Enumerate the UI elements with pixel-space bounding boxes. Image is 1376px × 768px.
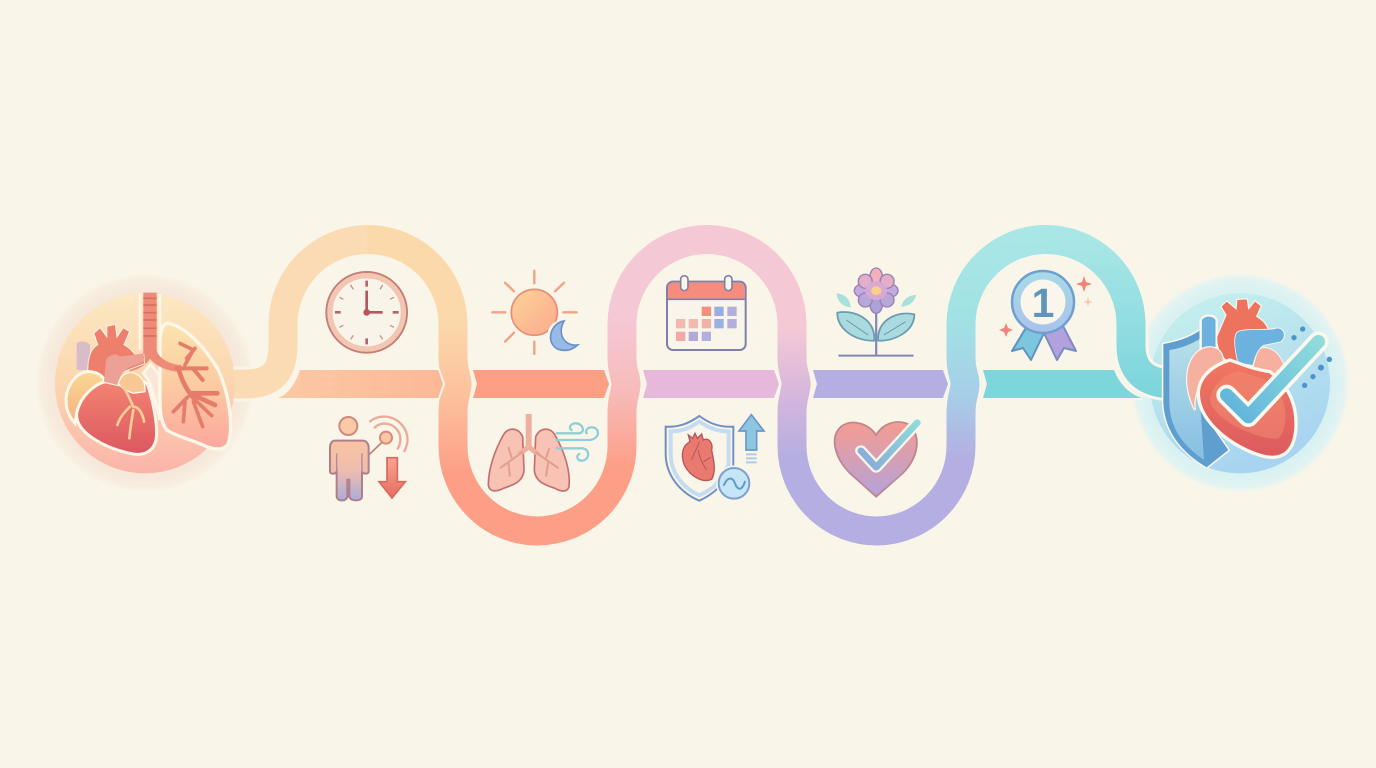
shield: [1163, 330, 1228, 467]
pulmonary artery: [1235, 328, 1284, 365]
icon: flower: [837, 268, 916, 356]
disc background: [1150, 293, 1330, 473]
icon: lungs with wind: [488, 414, 598, 491]
ventricles: [77, 381, 157, 454]
ventricle highlight: [1210, 372, 1285, 439]
aorta: [88, 325, 144, 382]
bar 4: [813, 370, 948, 398]
medal number: 1: [1032, 280, 1054, 326]
aorta: [1217, 299, 1268, 367]
icon: sun and moon: [492, 271, 578, 354]
right atrium: [1187, 347, 1223, 410]
lavender vessel: [77, 342, 90, 370]
icon: heart with check: [835, 422, 917, 497]
gap beside heart: [143, 364, 159, 420]
rear chamber: [1253, 348, 1284, 378]
icon: shield with heart: [666, 415, 764, 501]
pulmonary vessel: [104, 353, 144, 385]
disc background: [55, 293, 235, 473]
ribbon segment: start to first arch: [225, 239, 368, 384]
ribbon segment: teal arch to goal: [1046, 240, 1175, 384]
ribbon segment: first arch to coral trough: [367, 240, 538, 531]
ribbon segment: coral trough to pink arch: [537, 239, 708, 531]
progress dots: [1291, 326, 1332, 388]
icon: first place medal: [999, 271, 1093, 360]
bar 2: [473, 370, 609, 398]
ribbon end over disc: [1131, 320, 1175, 384]
icon: clock: [326, 272, 407, 353]
ribbon segment: pink arch to lilac trough: [707, 240, 878, 531]
goal disc: protected heart: [1131, 293, 1332, 473]
blue vessel: [1201, 315, 1217, 352]
right atrium: [118, 372, 145, 393]
trachea side lines: [140, 293, 160, 350]
winding pathway ribbon: [225, 239, 1175, 531]
bar 1: [277, 370, 443, 398]
left atrium: [66, 372, 105, 423]
start disc: heart and lungs: [55, 293, 235, 473]
icon: person with sensor and down arrow: [330, 417, 408, 500]
trachea and bronchial tree: [128, 293, 217, 427]
ventricles: [1198, 360, 1296, 457]
bar 5: [983, 370, 1142, 398]
horizontal step bars: [277, 370, 1142, 398]
right disc halo: [1133, 276, 1347, 490]
ribbon segment: lilac trough to teal arch: [877, 239, 1047, 531]
right lung: [160, 323, 231, 449]
left disc halo: [38, 276, 252, 490]
coronary arteries: [117, 385, 144, 438]
bar 3: [643, 370, 779, 398]
check mark: [1227, 342, 1318, 417]
icon: calendar: [667, 276, 746, 350]
